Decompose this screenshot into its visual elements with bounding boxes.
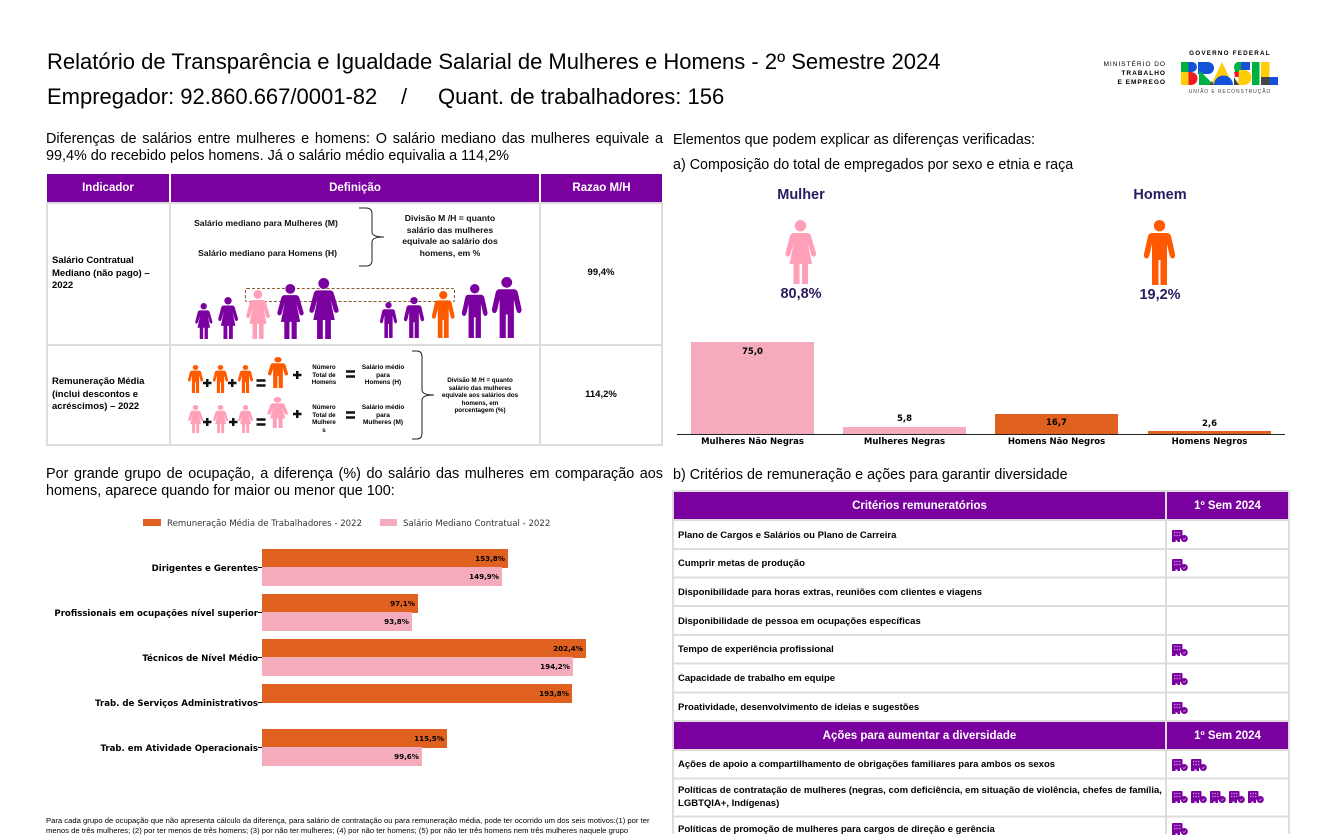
bars: Atividade Operacionais xyxy=(100,729,447,766)
header: semestre xyxy=(1167,492,1288,519)
table header: definição xyxy=(171,174,539,202)
panel: woman share xyxy=(777,187,825,302)
logo: governo federal xyxy=(1181,50,1278,95)
bars: Atividade Operacionais: 115,5% xyxy=(414,734,444,743)
bar: Homens Não Negros: Homens Não Negros xyxy=(1008,437,1105,447)
table header: indicador: Indicador xyxy=(82,182,134,194)
action: contratação xyxy=(678,785,1162,809)
label: divisão: Divisão M /H = quanto salário das mulheres equivale ao salário dos homens, em % xyxy=(402,213,498,258)
bars: Serviços Administrativos xyxy=(95,684,572,709)
criterion: equipe: Capacidade de trabalho em equipe xyxy=(678,673,835,684)
label: salário homens xyxy=(362,364,404,386)
bar: Mulheres Não Negras xyxy=(691,342,814,447)
bars: Profissionais: 93,8% xyxy=(384,617,409,626)
icons: median women xyxy=(195,278,339,339)
label: total mulheres: Total de xyxy=(312,412,336,418)
bars: Profissionais: Profissionais em ocupações nível superior xyxy=(54,609,259,619)
label: total homens: Homens xyxy=(312,379,336,386)
bars: Profissionais xyxy=(54,594,418,631)
chart: composition bars xyxy=(677,342,1285,447)
label: total mulheres: s xyxy=(322,426,326,434)
value: 114,2%: 114,2% xyxy=(585,389,617,400)
bars: Atividade Operacionais: Trab. em Atividade Operacionais xyxy=(100,744,258,754)
header: semestre: 1º Sem 2024 xyxy=(1194,500,1261,512)
label: Mulher: Mulher xyxy=(777,187,825,203)
chart: salary by occupation xyxy=(54,518,586,766)
row label: salário contratual: Salário Contratual Mediano (não pago) – 2022 xyxy=(52,255,150,291)
legend xyxy=(143,518,550,529)
bar: Mulheres Não Negras: Mulheres Não Negras xyxy=(701,437,804,447)
label: divisão: equivale aos salários dos xyxy=(442,392,518,399)
bar: Homens Negros: 2,6 xyxy=(1202,419,1217,429)
bars: Técnicos: Técnicos de Nível Médio xyxy=(142,653,258,664)
action: contratação: LGBTQIA+, Indígenas) xyxy=(678,798,779,809)
bars: Técnicos: 202,4% xyxy=(553,644,583,653)
logo: ministério: MINISTÉRIO DO xyxy=(1103,61,1166,68)
icons: men sum xyxy=(188,357,302,393)
brace xyxy=(412,350,434,440)
label: divisão xyxy=(442,377,518,414)
icon: woman xyxy=(785,220,816,284)
equals signs xyxy=(346,370,355,419)
title: Relatório de Transparência e Igualdade Salarial de Mulheres e Homens - 2º Semestre 2024 xyxy=(47,49,940,74)
label: mediano homens: Salário mediano para Homens (H) xyxy=(198,248,337,258)
table header: razão xyxy=(541,174,662,202)
bars: Serviços Administrativos: 193,8% xyxy=(539,689,569,698)
table header: definição: Definição xyxy=(329,182,381,194)
value: 19,2% xyxy=(1139,287,1181,303)
heading: explanatory elements: Elementos que podem explicar as diferenças verificadas: xyxy=(673,132,1035,148)
employer line: Empregador: 92.860.667/0001-82 xyxy=(47,84,377,109)
label: mediano mulheres: Salário mediano para Mulheres (M) xyxy=(194,218,338,228)
logo: ministério xyxy=(1103,60,1166,86)
label: total homens: Número xyxy=(312,364,336,371)
bars: Técnicos xyxy=(142,639,586,676)
action: compartilhamento: Ações de apoio a compartilhamento de obrigações familiares para ambos os sexos xyxy=(678,759,1055,770)
subheading: composition: a) Composição do total de empregados por sexo e etnia e raça xyxy=(673,157,1073,173)
label: divisão: salário das mulheres xyxy=(449,384,511,392)
bars: Dirigentes e Gerentes: Dirigentes e Gerentes xyxy=(152,564,258,574)
table header: indicador xyxy=(47,174,169,202)
footnote: menos de três mulheres; (2) por ter menos de três homens; (3) por não ter mulheres; (4) por não ter homens; (5) por não ter três homens nem três mulheres naquele grupo xyxy=(46,826,628,834)
logo: governo federal: UNIÃO E RECONSTRUÇÃO xyxy=(1189,89,1271,95)
bars: Dirigentes e Gerentes: 149,9% xyxy=(469,572,499,581)
logo: ministério: TRABALHO xyxy=(1121,70,1166,77)
bars: Atividade Operacionais: 99,6% xyxy=(394,752,419,761)
footnote xyxy=(46,816,650,834)
criterion: experiência: Tempo de experiência profissional xyxy=(678,644,834,655)
icons: median men xyxy=(380,277,522,338)
header: semestre: 1º Sem 2024 xyxy=(1194,730,1261,742)
header: critérios: Critérios remuneratórios xyxy=(852,500,987,512)
bar: Homens Negros xyxy=(1148,419,1271,447)
employer line xyxy=(47,84,724,109)
row label: remuneração média: Remuneração Média (inclui descontos e acréscimos) – 2022 xyxy=(52,376,144,412)
employer line: Quant. de trabalhadores: 156 xyxy=(438,84,724,109)
label: Homem: Homem xyxy=(1133,187,1187,203)
intro text: salary differences: Diferenças de salários entre mulheres e homens: O salário mediano das mulheres equivale a 99,4% do recebido pelos homens. Já o salário médio equivalia a 114,2% xyxy=(46,131,663,164)
label: total mulheres xyxy=(312,404,336,434)
criterion: proatividade: Proatividade, desenvolvimento de ideias e sugestões xyxy=(678,702,919,713)
action: contratação: Políticas de contratação de mulheres (negras, com deficiência, em situação de violência, chefes de família, xyxy=(678,785,1162,796)
header: semestre xyxy=(1167,722,1288,749)
brace xyxy=(359,208,384,266)
criterion: plano de cargos: Plano de Cargos e Salários ou Plano de Carreira xyxy=(678,530,896,541)
bar: Homens Não Negros xyxy=(995,414,1118,447)
label: divisão: homens, em xyxy=(462,400,498,406)
icons: women sum xyxy=(188,397,302,433)
label: salário homens: Salário médio xyxy=(362,364,404,371)
criterion: ocupações específicas: Disponibilidade de pessoa em ocupações específicas xyxy=(678,616,921,627)
logo: governo federal: GOVERNO FEDERAL xyxy=(1189,50,1271,57)
bars: Profissionais: 97,1% xyxy=(390,599,415,608)
header: critérios xyxy=(674,492,1165,519)
dashed highlight xyxy=(245,288,455,302)
bar: Homens Negros: Homens Negros xyxy=(1172,437,1247,447)
bar: Mulheres Negras: Mulheres Negras xyxy=(864,437,945,447)
label: total homens: Total de xyxy=(312,372,336,378)
label: divisão: porcentagem (%) xyxy=(454,407,506,414)
label: salário mulheres: Mulheres (M) xyxy=(363,419,403,426)
heading: occupation groups: Por grande grupo de ocupação, a diferença (%) do salário das mulheres em comparação aos homens, aparece quando for maior ou menor que 100: xyxy=(46,466,663,499)
header: ações xyxy=(674,722,1165,749)
legend: Remuneração Média de Trabalhadores - 2022 xyxy=(167,518,362,529)
logo: ministério: E EMPREGO xyxy=(1118,79,1166,86)
table header: razão: Razao M/H xyxy=(572,182,631,194)
icon: man xyxy=(1144,220,1176,285)
bar: Mulheres Negras xyxy=(843,414,966,447)
label: total mulheres: Número xyxy=(312,404,336,411)
criterion: horas extras: Disponibilidade para horas extras, reuniões com clientes e viagens xyxy=(678,587,982,598)
criterion: metas: Cumprir metas de produção xyxy=(678,558,805,569)
bar: Mulheres Negras: 5,8 xyxy=(897,414,912,424)
bars: Dirigentes e Gerentes: 153,8% xyxy=(475,554,505,563)
panel: indicator table xyxy=(46,174,663,446)
diagram: median salary xyxy=(194,208,522,339)
label: salário mulheres xyxy=(362,404,404,426)
diagram: average pay xyxy=(188,350,518,440)
value: 99,4%: 99,4% xyxy=(588,267,614,278)
bars: Serviços Administrativos: Trab. de Serviços Administrativos xyxy=(95,699,258,709)
label: salário mulheres: Salário médio xyxy=(362,404,404,411)
label: salário mulheres: para xyxy=(376,412,390,418)
value: 80,8% xyxy=(780,286,822,302)
header: ações: Ações para aumentar a diversidade xyxy=(823,730,1016,742)
footnote: Para cada grupo de ocupação que não apresenta cálculo da diferença, para salário de contratação ou para remuneração média, pode ter ocorrido um dos seis motivos:(1) por ter xyxy=(46,816,650,825)
action: promoção: Políticas de promoção de mulheres para cargos de direção e gerência xyxy=(678,824,995,835)
subheading: criteria: b) Critérios de remuneração e ações para garantir diversidade xyxy=(673,467,1068,483)
label: divisão: Divisão M /H = quanto xyxy=(447,377,513,384)
bar: Homens Não Negros: 16,7 xyxy=(1046,418,1067,428)
label: salário homens: para xyxy=(376,372,390,378)
label: total homens xyxy=(312,364,336,386)
legend: Salário Mediano Contratual - 2022 xyxy=(403,519,550,529)
employer line: / xyxy=(401,84,407,109)
icons: building checks xyxy=(1172,530,1264,835)
bars: Técnicos: 194,2% xyxy=(540,662,570,671)
label: salário homens: Homens (H) xyxy=(365,379,401,386)
bar: Mulheres Não Negras: 75,0 xyxy=(742,347,763,357)
panel: man share xyxy=(1133,187,1187,303)
bars: Dirigentes e Gerentes xyxy=(152,549,508,586)
label: total mulheres: Mulhere xyxy=(312,419,336,426)
